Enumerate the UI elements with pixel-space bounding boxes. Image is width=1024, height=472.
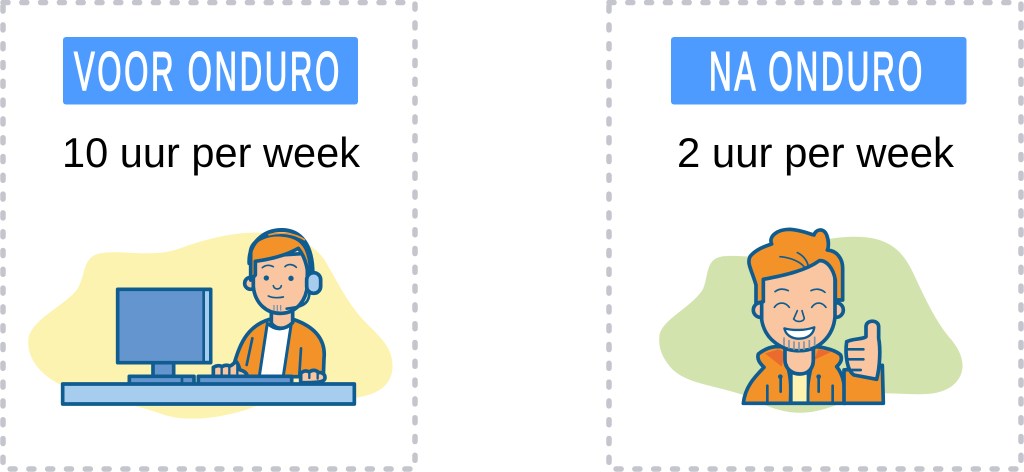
panel: voor onduro [3,2,415,469]
panel: na onduro [609,2,1021,469]
desk [63,384,354,404]
keyboard [198,376,292,384]
yellow background blob [28,233,393,419]
person with headset [230,230,324,377]
dashed panel border [3,2,415,469]
thumbs up hand and sleeve [844,321,883,403]
head [753,260,843,351]
heading: na onduro [671,37,966,104]
illustration: smiling man with thumbs up [659,229,963,413]
hands on keyboard [213,361,325,383]
computer monitor [118,289,211,384]
green background blob [659,237,963,413]
text: 10 uur per week: 10 uur per week [62,129,361,176]
dashed panel border [609,2,1021,469]
hair [749,229,843,303]
hair detail strokes [780,253,808,267]
body with hoodie [743,347,845,403]
heading: voor onduro: VOOR ONDURO [74,40,342,102]
illustration: man with headset at computer [28,230,393,419]
text: 2 uur per week: 2 uur per week [677,129,955,176]
heading: voor onduro [63,37,358,104]
